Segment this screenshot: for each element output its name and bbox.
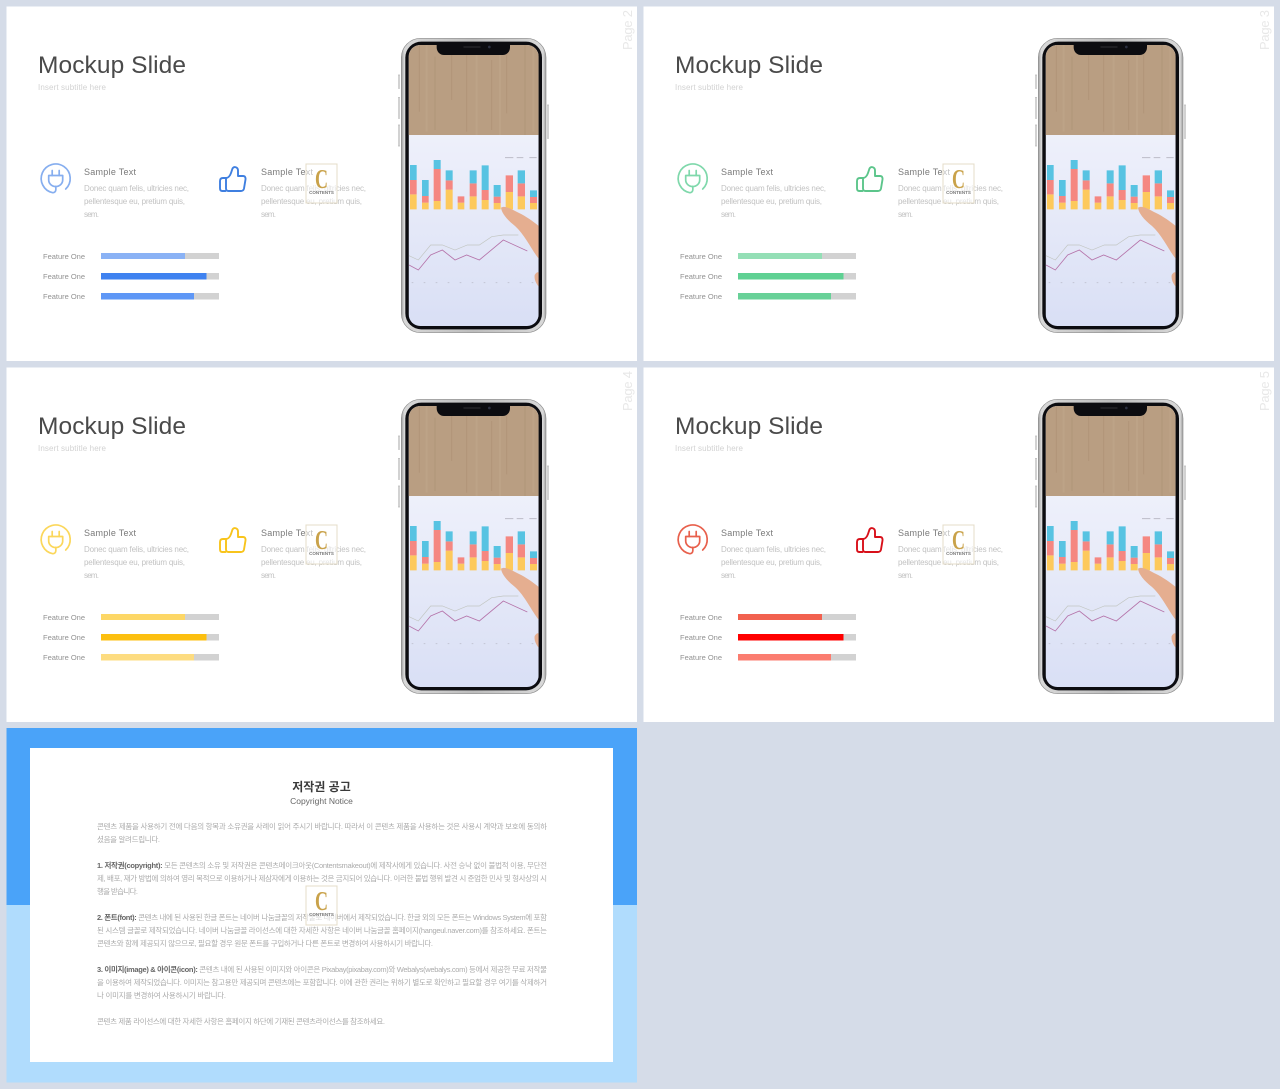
text block: intro: 셨음을 알려드립니다. bbox=[97, 834, 160, 844]
bar chart: features bbox=[680, 252, 856, 301]
text block: sample text right: Donec quam felis, ultricies nec, bbox=[261, 184, 366, 193]
watermark logo: CONTENTS bbox=[309, 551, 334, 556]
text block: sample text left bbox=[721, 167, 826, 219]
phone mockup bbox=[398, 399, 549, 694]
icon: plug bbox=[41, 525, 70, 554]
title: Mockup Slide bbox=[38, 413, 186, 440]
text block: image and icon: 나 이미지를 변경하여 사용하시기 바랍니다. bbox=[97, 990, 226, 1000]
text block: sample text right bbox=[898, 167, 1003, 219]
text block: sample text right: Donec quam felis, ultricies nec, bbox=[898, 184, 1003, 193]
watermark logo bbox=[306, 525, 337, 564]
page number: Page 5 bbox=[1257, 371, 1272, 411]
text block: sample text left: pellentesque eu, pretium quis, bbox=[721, 558, 822, 567]
text block: sample text left: Sample Text bbox=[721, 528, 773, 538]
text block: sample text left bbox=[84, 167, 189, 219]
text block: image and icon: 3. 이미지(image) & 아이콘(icon): 콘텐츠 내에 된 사용된 이미지와 아이콘은 Pixabay(pixabay.com)와 Webalys(webalys.com) 등에서 제공한 무료 저작물 bbox=[97, 964, 547, 974]
text block: sample text right bbox=[261, 167, 366, 219]
icon: thumbs up bbox=[220, 528, 246, 552]
bar chart: features: Feature One bbox=[680, 613, 722, 622]
text block: sample text left bbox=[84, 528, 189, 580]
bar chart: features: Feature One bbox=[43, 252, 85, 261]
text block: sample text right: sem. bbox=[898, 210, 913, 219]
watermark logo: C bbox=[952, 164, 965, 194]
text block: sample text right: Donec quam felis, ultricies nec, bbox=[898, 545, 1003, 554]
bar chart: features: Feature One bbox=[43, 633, 85, 642]
panel: slide page 4 (yellow) bbox=[6, 368, 637, 722]
watermark logo bbox=[306, 164, 337, 203]
bar chart: features: Feature One bbox=[43, 653, 85, 662]
panel: slide page 3 (green) bbox=[644, 6, 1274, 361]
text block: sample text right: sem. bbox=[261, 210, 276, 219]
text block: sample text right bbox=[261, 528, 366, 580]
subtitle: Insert subtitle here bbox=[38, 444, 107, 453]
text block: sample text left: Sample Text bbox=[84, 528, 136, 538]
page number: Page 3 bbox=[1257, 10, 1272, 50]
text block: intro: 콘텐츠 제품을 사용하기 전에 다음의 항목과 소유권을 사례이 읽어 주시기 바랍니다. 따라서 이 콘텐츠 제품을 사용하는 것은 사용시 계약과 보호에 동의하 bbox=[97, 821, 547, 831]
text block: intro bbox=[97, 821, 547, 844]
text block: sample text left: Donec quam felis, ultricies nec, bbox=[84, 184, 189, 193]
subtitle: Insert subtitle here bbox=[38, 83, 107, 92]
page number: Page 2 bbox=[620, 10, 635, 50]
text block: sample text left: sem. bbox=[721, 210, 736, 219]
text block: sample text left: pellentesque eu, pretium quis, bbox=[721, 197, 822, 206]
subtitle: Insert subtitle here bbox=[675, 444, 744, 453]
text block: sample text left: Donec quam felis, ultricies nec, bbox=[721, 184, 826, 193]
text block: sample text right: pellentesque eu, pretium quis, bbox=[261, 197, 362, 206]
text block: sample text left: sem. bbox=[84, 571, 99, 580]
text block: sample text right: pellentesque eu, pretium quis, bbox=[898, 558, 999, 567]
phone mockup bbox=[398, 38, 549, 333]
text block: sample text right: Sample Text bbox=[898, 528, 950, 538]
text block: copyright: 1. 저작권(copyright): 모든 콘텐츠의 소유 및 저작권은 콘텐츠메이크아웃(Contentsmakeout)에 제작사에게 있습니다. 사전 승낙 없이 불법적 이용, 무단전 bbox=[97, 860, 547, 870]
text block: font: 된 시스템 글꼴로 제작되었습니다. 네이버 나눔글꼴 라이선스에 대한 자세한 사항은 네이버 나눔글꼴 홈페이지(hangeul.naver.com)를 참조하세요. 폰트는 bbox=[97, 925, 547, 935]
panel: slide page 5 (red) bbox=[644, 368, 1274, 722]
bar chart: features: Feature One bbox=[680, 653, 722, 662]
bar chart: features: Feature One bbox=[43, 613, 85, 622]
bar chart: features bbox=[43, 252, 219, 301]
title: Mockup Slide bbox=[38, 52, 186, 79]
text block: font bbox=[97, 912, 547, 948]
text block: license note: 콘텐츠 제품 라이선스에 대한 자세한 사항은 홈페이지 하단에 기재된 콘텐츠라이선스를 참조하세요. bbox=[97, 1016, 385, 1026]
title: Mockup Slide bbox=[675, 52, 823, 79]
text block: sample text left: pellentesque eu, pretium quis, bbox=[84, 197, 185, 206]
watermark logo: CONTENTS bbox=[946, 190, 971, 195]
text block: sample text left: Donec quam felis, ultricies nec, bbox=[84, 545, 189, 554]
title: Mockup Slide bbox=[675, 413, 823, 440]
icon: plug bbox=[678, 525, 707, 554]
bar chart: features: Feature One bbox=[680, 292, 722, 301]
text block: copyright: 행을 받습니다. bbox=[97, 886, 138, 896]
watermark logo: CONTENTS bbox=[946, 551, 971, 556]
phone mockup bbox=[1035, 399, 1186, 694]
icon: plug bbox=[678, 164, 707, 193]
text block: sample text right bbox=[898, 528, 1003, 580]
panel: slide page 2 (blue) bbox=[6, 6, 637, 361]
watermark logo bbox=[943, 164, 974, 203]
text block: copyright: 제, 배포, 재가 방법에 의하여 영리 목적으로 이용하거나 제삼자에게 이용하는 것은 금지되어 있습니다. 이러한 불법 행위 발견 시 준엄한 민사 및 형사상의 시 bbox=[97, 873, 547, 883]
text block: sample text right: Sample Text bbox=[898, 167, 950, 177]
watermark logo bbox=[306, 886, 337, 925]
text block: font: 2. 폰트(font): 콘텐츠 내에 된 사용된 한글 폰트는 네이버 나눔글꼴의 저작물로 네이버에서 제작되었습니다. 한글 외의 모든 폰트는 Windows System에 포함 bbox=[97, 912, 547, 922]
bar chart: features: Feature One bbox=[43, 292, 85, 301]
watermark logo: C bbox=[315, 525, 328, 555]
text block: image and icon bbox=[97, 964, 547, 1000]
bar chart: features bbox=[43, 613, 219, 662]
bar chart: features bbox=[680, 613, 856, 662]
heading: notice title: 저작권 공고 bbox=[292, 779, 351, 794]
phone mockup bbox=[1035, 38, 1186, 333]
text block: sample text right: pellentesque eu, pretium quis, bbox=[898, 197, 999, 206]
text block: sample text right: sem. bbox=[261, 571, 276, 580]
text block: sample text left: Sample Text bbox=[721, 167, 773, 177]
text block: sample text right: Sample Text bbox=[261, 167, 313, 177]
text block: sample text right: Sample Text bbox=[261, 528, 313, 538]
watermark logo: C bbox=[952, 525, 965, 555]
panel: copyright notice bbox=[6, 728, 637, 1082]
watermark logo: CONTENTS bbox=[309, 912, 334, 917]
text block: sample text left: Sample Text bbox=[84, 167, 136, 177]
text block: sample text left: pellentesque eu, pretium quis, bbox=[84, 558, 185, 567]
bar chart: features: Feature One bbox=[680, 252, 722, 261]
icon: thumbs up bbox=[857, 167, 883, 191]
text block: sample text left: sem. bbox=[721, 571, 736, 580]
bar chart: features: Feature One bbox=[680, 633, 722, 642]
text block: copyright bbox=[97, 860, 547, 896]
watermark logo: CONTENTS bbox=[309, 190, 334, 195]
page number: Page 4 bbox=[620, 371, 635, 411]
bar chart: features: Feature One bbox=[43, 272, 85, 281]
icon: thumbs up bbox=[220, 167, 246, 191]
subtitle: Insert subtitle here bbox=[675, 83, 744, 92]
text block: font: 콘텐츠와 함께 제공되지 않으므로, 필요할 경우 원문 폰트를 구입하거나 다른 폰트로 변경하여 사용하시기 바랍니다. bbox=[97, 938, 433, 948]
icon: plug bbox=[41, 164, 70, 193]
text block: sample text right: sem. bbox=[898, 571, 913, 580]
text block: sample text right: Donec quam felis, ultricies nec, bbox=[261, 545, 366, 554]
text block: sample text left: sem. bbox=[84, 210, 99, 219]
text block: sample text left: Donec quam felis, ultricies nec, bbox=[721, 545, 826, 554]
bar chart: features: Feature One bbox=[680, 272, 722, 281]
watermark logo: C bbox=[315, 164, 328, 194]
text block: sample text left bbox=[721, 528, 826, 580]
watermark logo: C bbox=[315, 886, 328, 916]
icon: thumbs up bbox=[857, 528, 883, 552]
subheading: Copyright Notice bbox=[290, 796, 353, 806]
watermark logo bbox=[943, 525, 974, 564]
text block: image and icon: 을 이용하여 제작되었습니다. 이미지는 참고용만 제공되며 콘텐츠에는 포함합니다. 이에 관한 권리는 위하기 별도로 확인하고 필요할 경우 여기를 삭제하거 bbox=[97, 977, 547, 987]
text block: sample text right: pellentesque eu, pretium quis, bbox=[261, 558, 362, 567]
